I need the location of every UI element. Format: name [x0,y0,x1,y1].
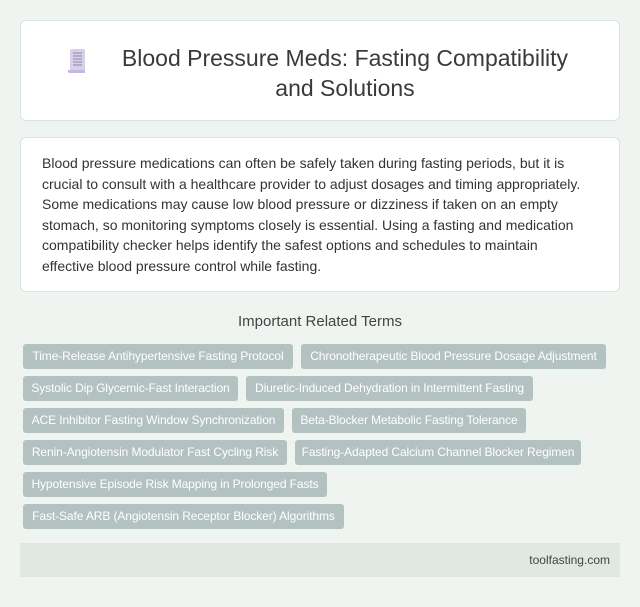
tag: Time-Release Antihypertensive Fasting Protocol [32,349,284,363]
tag: Renin-Angiotensin Modulator Fast Cycling Risk [32,445,278,459]
tag [23,408,284,433]
tag [23,472,327,497]
tag: Beta-Blocker Metabolic Fasting Tolerance [300,413,518,427]
footer [20,543,620,577]
tag: ACE Inhibitor Fasting Window Synchronization [32,413,275,427]
description text: Blood pressure medications can often be safely taken during fasting periods, but it is crucial to consult with a healthcare provider to adjust dosages and timing appropriately. Some medications may cause low blood pressure or dizziness if taken on an empty stomach, so monitoring symptoms closely is essential. Using a fasting and medication compatibility checker helps identify the safest options and schedules to maintain effective blood pressure control while fasting. [42,155,580,274]
tag: Fasting-Adapted Calcium Channel Blocker Regimen [302,445,574,459]
tag [246,376,533,401]
tag: Fast-Safe ARB (Angiotensin Receptor Blocker) Algorithms [32,509,335,523]
section heading: Important Related Terms [238,313,402,330]
tag [301,344,606,369]
tag: Hypotensive Episode Risk Mapping in Prolonged Fasts [31,477,319,491]
tag [23,344,293,369]
tag: Diuretic-Induced Dehydration in Intermittent Fasting [255,381,524,395]
tag [292,408,526,433]
footer text: toolfasting.com [529,553,610,567]
tag: Systolic Dip Glycemic-Fast Interaction [31,381,230,395]
tag [23,440,287,465]
title card [20,20,620,121]
tag: Chronotherapeutic Blood Pressure Dosage Adjustment [310,349,597,363]
tag [295,440,581,465]
description card [20,137,620,292]
icon: document [68,49,85,73]
title: Blood Pressure Meds: Fasting Compatibility and Solutions [122,45,568,101]
tag [23,504,344,529]
tag [23,376,238,401]
